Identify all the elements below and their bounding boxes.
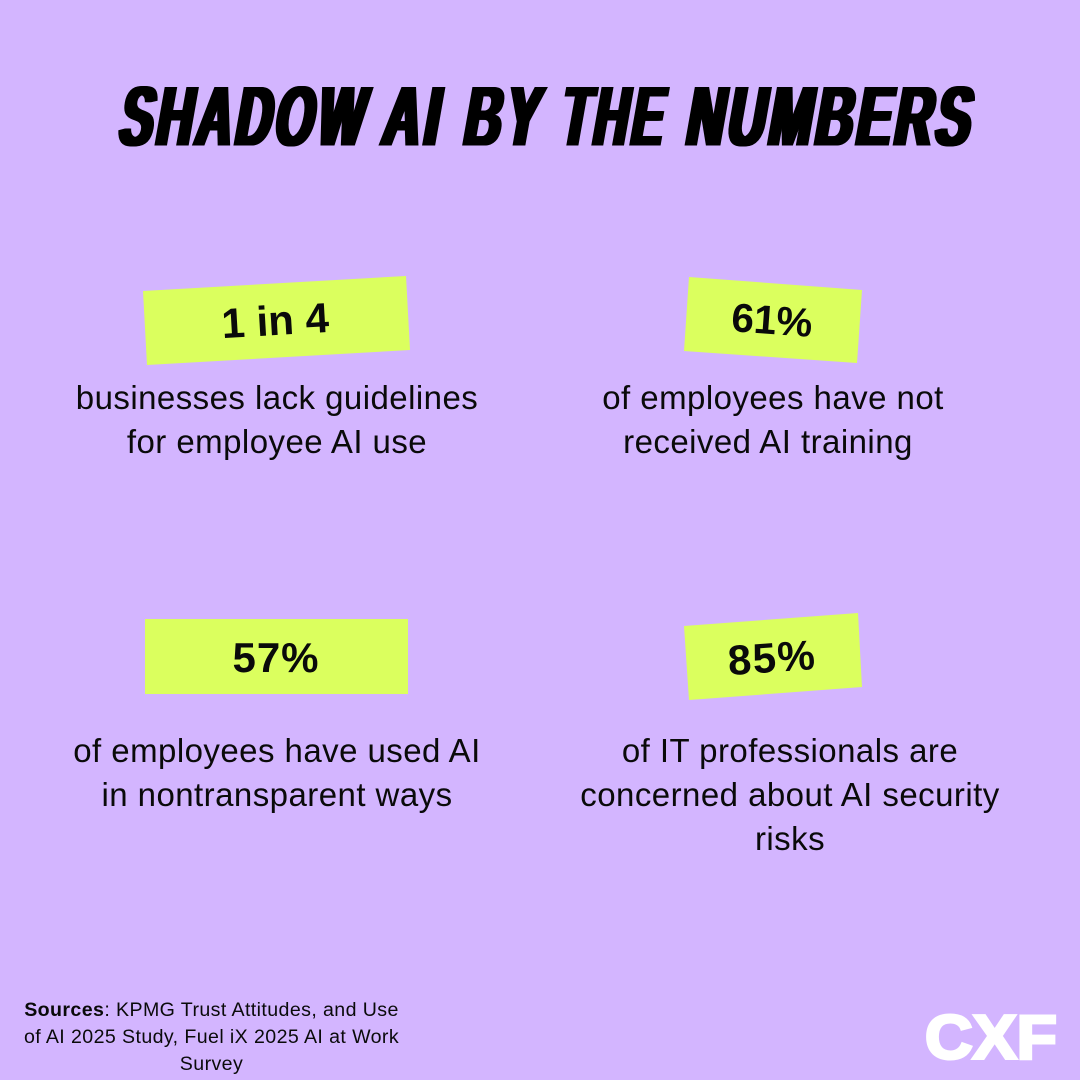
text: nontransparent use: in nontransparent ways: [101, 776, 453, 813]
text: employees not trained: received AI training: [623, 423, 913, 460]
text: businesses lack guidelines: for employee AI use: [127, 423, 427, 460]
badge: 85%: 85%: [726, 631, 818, 684]
badge: 61%: 61%: [730, 294, 814, 346]
sources: of AI 2025 Study, Fuel iX 2025 AI at Work: [24, 1026, 399, 1048]
title: BY: [458, 69, 553, 164]
sources: [24, 999, 399, 1075]
sources: Survey: [180, 1053, 243, 1075]
text: nontransparent use: of employees have used AI: [73, 732, 481, 769]
text: employees not trained: [602, 379, 944, 460]
title: NUMBERS: [681, 69, 985, 164]
text: employees not trained: of employees have not: [602, 379, 944, 416]
title: THE: [555, 69, 677, 164]
text: businesses lack guidelines: [76, 379, 478, 460]
badge: 57%: [145, 619, 408, 694]
title: AI: [377, 69, 454, 164]
text: nontransparent use: [73, 732, 481, 813]
badge: 1 in 4: 1 in 4: [220, 294, 331, 347]
badge: 57%: 57%: [232, 634, 320, 681]
badge: 61%: [684, 277, 862, 363]
logo: CXF: CXF: [925, 1004, 1057, 1072]
badge: 85%: [684, 613, 862, 700]
sources: Sources: KPMG Trust Attitudes, and Use: [24, 999, 399, 1021]
text: businesses lack guidelines: businesses lack guidelines: [76, 379, 478, 416]
badge: 1 in 4: [143, 276, 410, 365]
title: [114, 69, 985, 164]
text: IT professionals concerned: concerned about AI security: [580, 776, 1000, 813]
text: IT professionals concerned: risks: [755, 820, 825, 857]
title: SHADOW: [114, 69, 378, 164]
text: IT professionals concerned: [580, 732, 1000, 857]
text: IT professionals concerned: of IT professionals are: [622, 732, 958, 769]
